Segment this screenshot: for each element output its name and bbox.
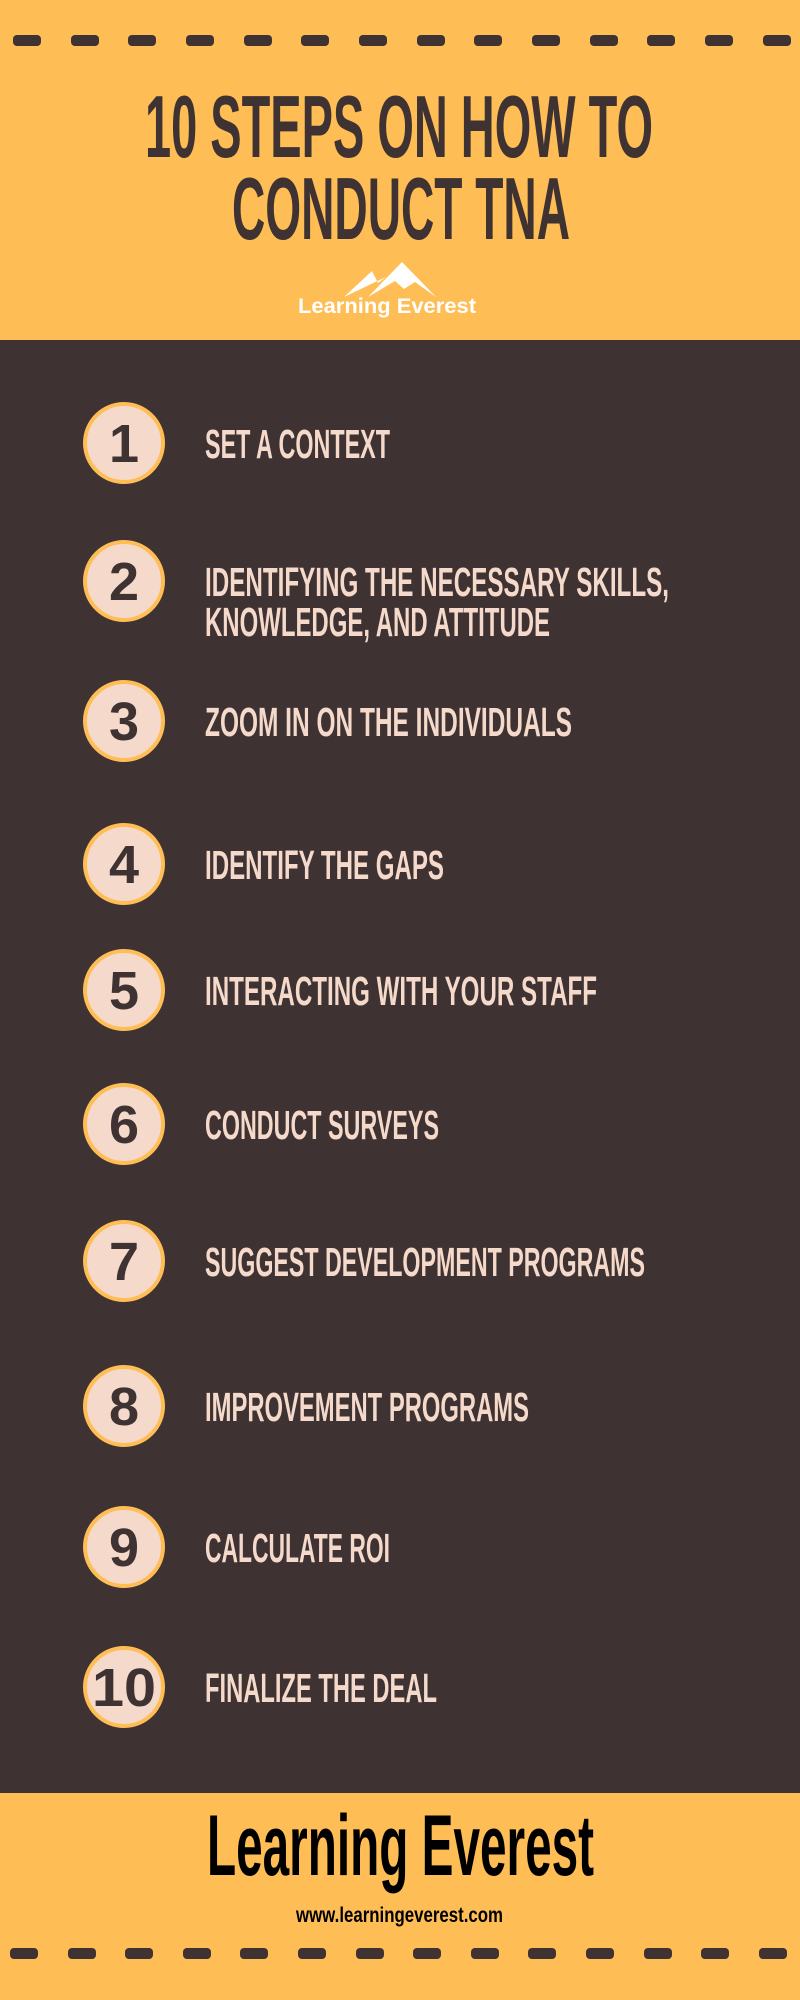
step 3: 3	[109, 692, 139, 752]
step 6	[85, 1085, 439, 1163]
step 4	[85, 825, 444, 903]
step 7: 7	[109, 1232, 139, 1292]
step 10: FINALIZE THE DEAL	[205, 1665, 437, 1711]
footer panel	[0, 1793, 800, 2000]
step 4: IDENTIFY THE GAPS	[205, 842, 444, 888]
step 9: CALCULATE ROI	[205, 1525, 390, 1571]
step 10	[85, 1648, 437, 1726]
step 2: 2	[109, 552, 139, 612]
step 8	[85, 1367, 529, 1445]
step 4: 4	[109, 835, 139, 895]
step 6: CONDUCT SURVEYS	[205, 1102, 439, 1148]
step 6: 6	[109, 1095, 139, 1155]
title	[145, 77, 653, 258]
header panel	[0, 0, 800, 340]
icon: mountains	[344, 262, 436, 297]
step 2	[85, 542, 669, 645]
panel: steps	[0, 340, 800, 1793]
footer url: www.learningeverest.com	[295, 1904, 503, 1927]
step 9	[85, 1508, 390, 1586]
step 5	[85, 951, 597, 1029]
step 1	[85, 404, 390, 482]
step 7	[85, 1222, 645, 1300]
step 8: 8	[109, 1377, 139, 1437]
logo: Learning Everest	[298, 262, 476, 318]
step 1: 1	[109, 414, 139, 474]
step 5: 5	[109, 961, 139, 1021]
step 1: SET A CONTEXT	[205, 421, 390, 467]
step 9: 9	[109, 1518, 139, 1578]
logo: Learning Everest: Learning Everest	[298, 295, 476, 318]
step 8: IMPROVEMENT PROGRAMS	[205, 1384, 529, 1430]
step 10: 10	[92, 1658, 156, 1718]
step 3	[85, 682, 572, 760]
step 2: KNOWLEDGE, AND ATTITUDE	[205, 599, 550, 645]
